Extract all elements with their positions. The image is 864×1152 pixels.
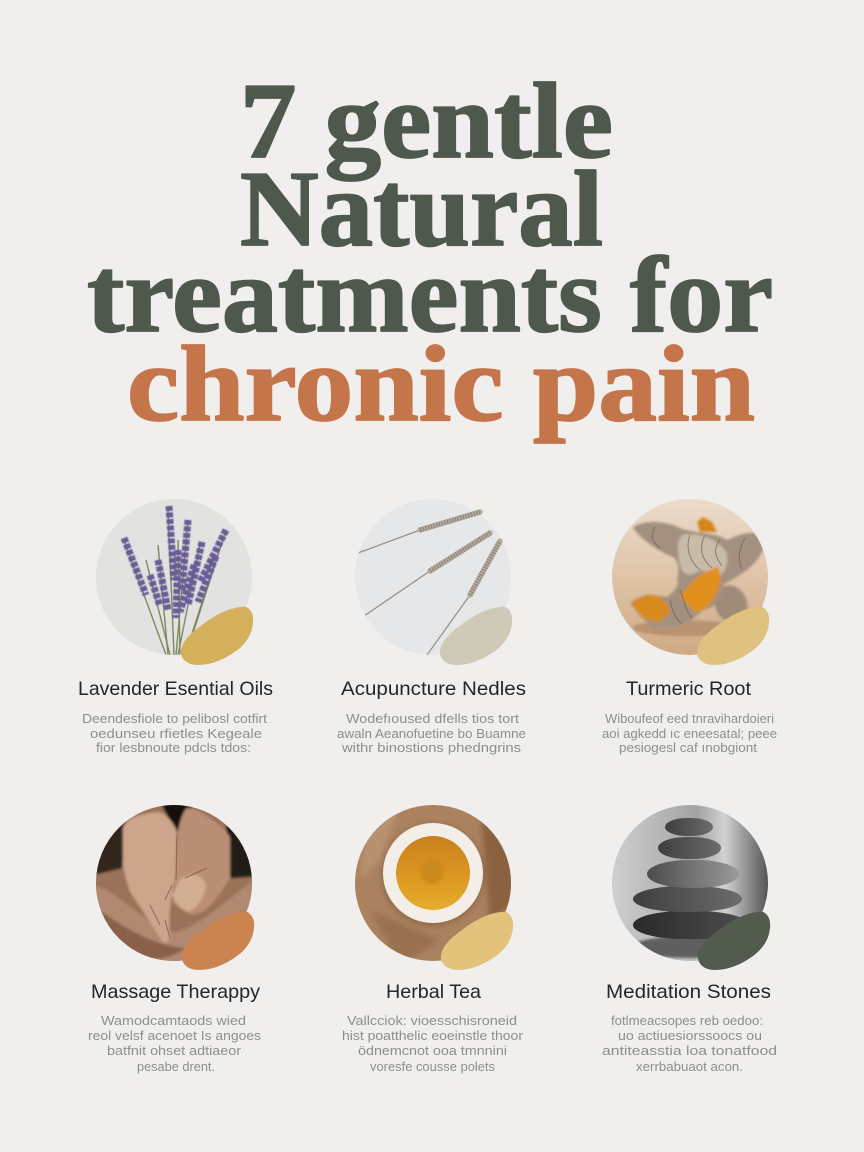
accent blob: moss <box>698 912 770 970</box>
description: awaln Aeanofuetine bo Buamne <box>337 726 526 741</box>
description: xerrbabuaot acon. <box>636 1059 743 1074</box>
accent blob: mustard <box>181 607 253 665</box>
description: Wiboufeof eed tnravihardoieri <box>605 711 774 726</box>
icon: tea cup <box>355 805 515 965</box>
title: treatments for <box>87 236 773 355</box>
description: uo actiuesiorssoocs ou <box>618 1028 762 1043</box>
title: chronic pain <box>127 325 755 444</box>
description: fior lesbnoute pdcls tdos: <box>96 740 251 755</box>
description: oedunseu rfietles Kegeale <box>90 726 262 741</box>
title: Natural <box>240 150 603 269</box>
description: fotlmeacsopes reb oedoo: <box>611 1013 763 1028</box>
title: 7 gentle <box>240 62 613 181</box>
description: Wodefıoused dfells tios tort <box>346 711 519 726</box>
description <box>82 711 267 755</box>
heading: Turmeric Root <box>626 678 752 700</box>
description <box>602 711 777 755</box>
panel: massage therapy <box>88 800 261 1074</box>
accent blob: terracotta <box>182 912 254 970</box>
title <box>87 62 773 444</box>
description: ödnemcnot ooa tmnnini <box>358 1043 507 1058</box>
heading: Massage Therappy <box>91 981 260 1003</box>
panel: herbal tea <box>342 805 524 1074</box>
accent blob: honey <box>441 912 513 970</box>
description: aoi agkedd ıc eneesatal; peee <box>602 726 777 741</box>
description <box>337 711 526 755</box>
description: Vallcciok: vioesschisroneid <box>347 1013 517 1028</box>
panel: turmeric root <box>602 499 777 755</box>
heading: Acupuncture Nedles <box>341 678 526 700</box>
panel: meditation stones <box>602 805 777 1074</box>
icon: hands <box>96 805 252 961</box>
accent blob: sand <box>697 607 769 665</box>
description: hist poatthelic eoeinstle thoor <box>342 1028 524 1043</box>
description: voresfe cousse polets <box>370 1059 495 1074</box>
panel: acupuncture needles <box>337 499 526 755</box>
description <box>88 1013 261 1074</box>
description: pesabe drent. <box>137 1059 215 1074</box>
panel: lavender essential oils <box>78 499 273 755</box>
cup <box>383 823 483 923</box>
description: batfnit ohset adtiaeor <box>107 1043 242 1058</box>
accent blob: stone <box>440 607 512 665</box>
icon: stacked stones <box>612 805 768 961</box>
description <box>342 1013 524 1074</box>
description <box>602 1013 777 1074</box>
description: Wamodcamtaods wied <box>101 1013 246 1028</box>
icon: lavender bouquet <box>96 499 252 655</box>
heading: Lavender Esential Oils <box>78 678 273 700</box>
heading: Herbal Tea <box>386 981 481 1003</box>
description: Deendesfiole to pelibosl cotfirt <box>82 711 267 726</box>
description: pesiogesl caf ınobgiont <box>619 740 757 755</box>
heading: Meditation Stones <box>606 981 771 1003</box>
icon: needles <box>355 499 511 655</box>
description: antiteasstia loa tonatfood <box>602 1043 777 1058</box>
description: withr binostions phedngrins <box>341 740 521 755</box>
description: reol velsf acenoet Is angoes <box>88 1028 261 1043</box>
icon: turmeric <box>612 499 768 655</box>
